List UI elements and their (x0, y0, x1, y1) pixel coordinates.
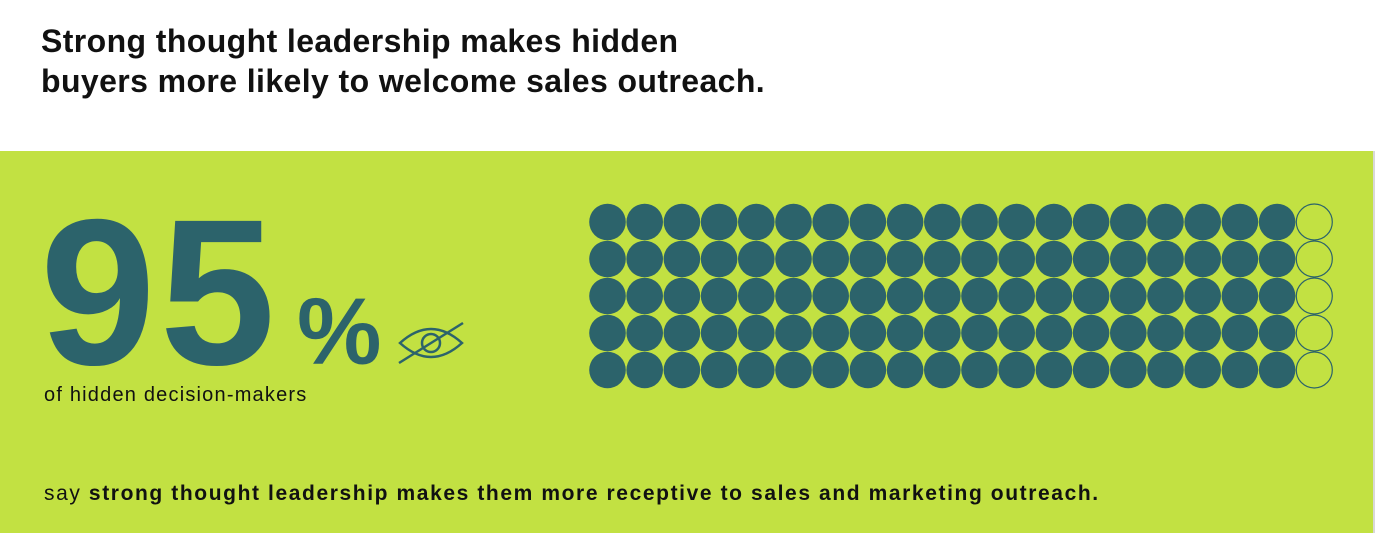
icon: crossed-out eye (398, 322, 464, 364)
big number 95: 95 (40, 177, 279, 409)
title: buyers more likely to welcome sales outreach. (41, 63, 765, 99)
text: of hidden decision-makers: of hidden decision-makers (44, 384, 307, 406)
text: bottom statement: say strong thought leadership makes them more receptive to sales and marketing outreach. (44, 482, 1100, 505)
percent sign: % (297, 279, 381, 385)
dot chart: 95 of 100 (589, 203, 1333, 389)
title (41, 23, 765, 99)
title: Strong thought leadership makes hidden (41, 23, 678, 59)
panel: green stat panel (0, 151, 1375, 533)
